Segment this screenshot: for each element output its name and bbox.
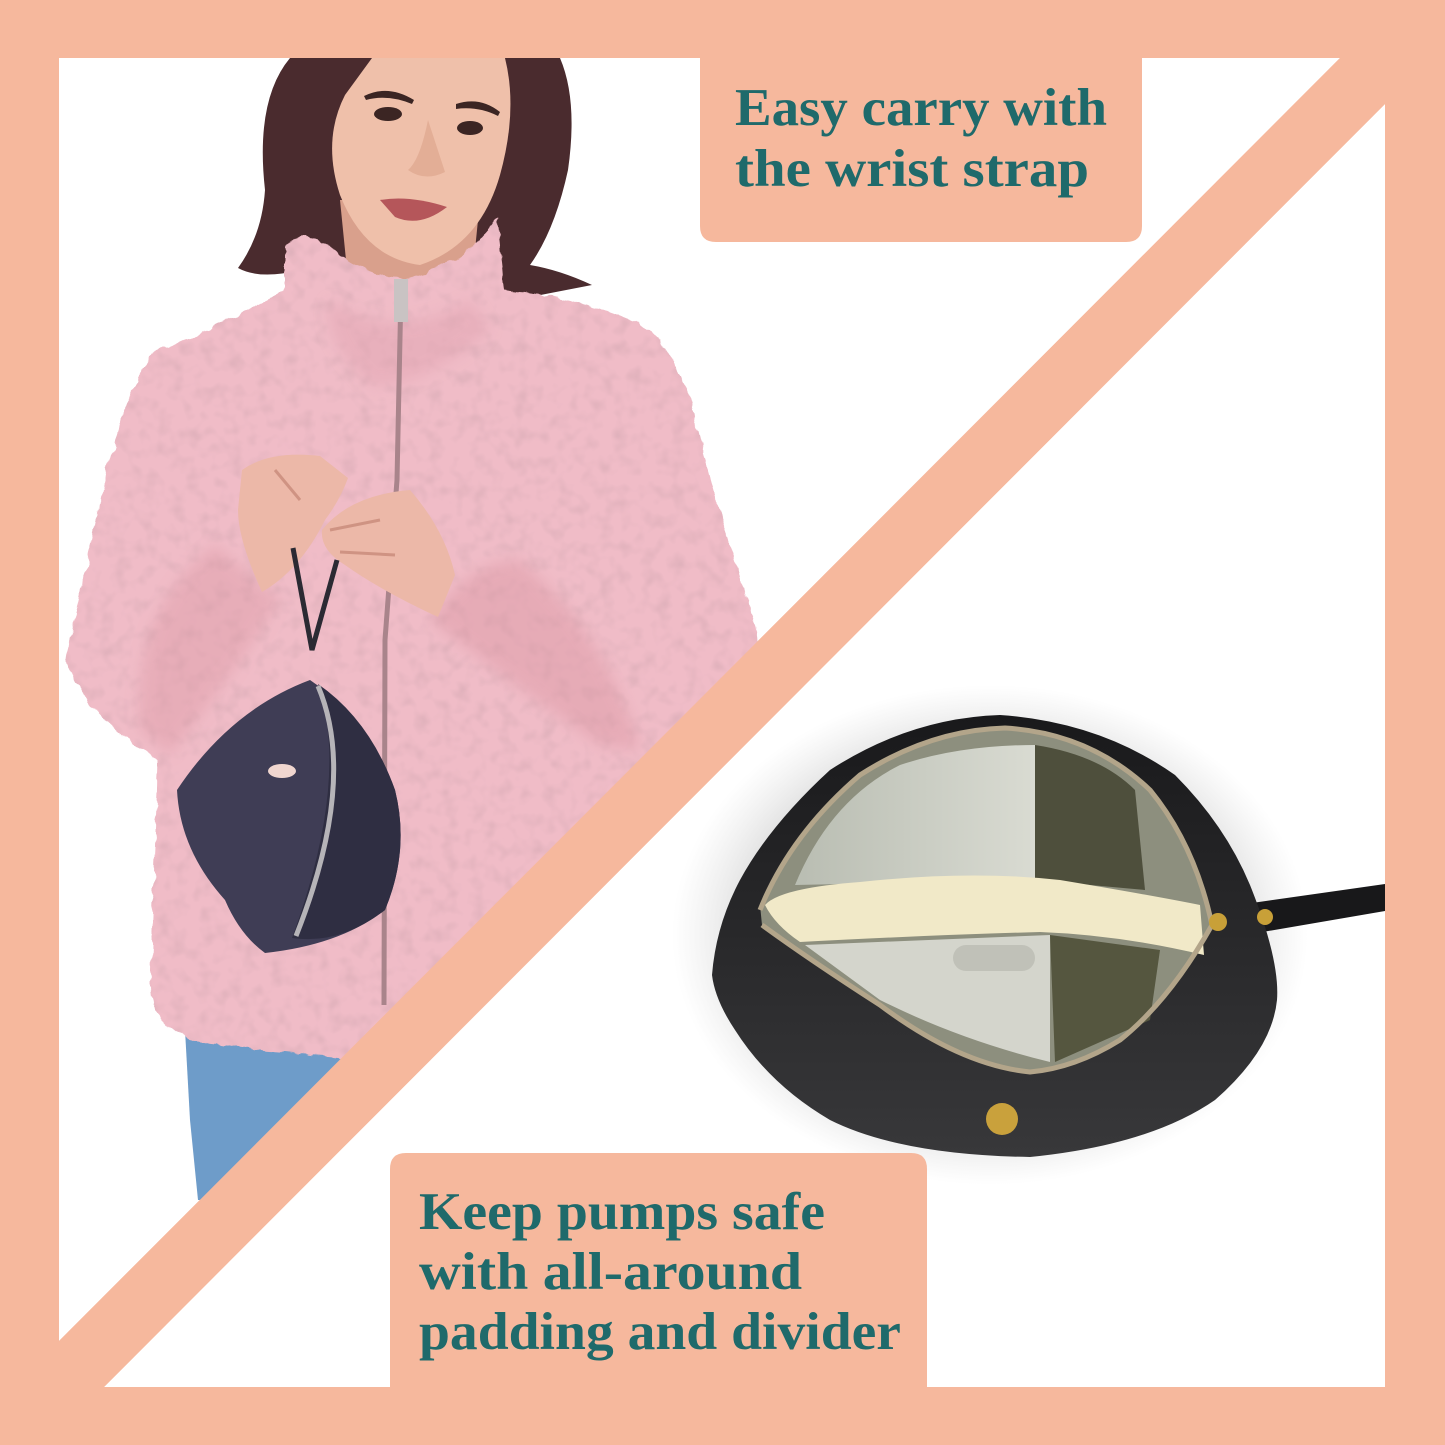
pump button — [953, 945, 1035, 971]
wrist strap — [1238, 884, 1385, 935]
panel: upper-left white triangle — [59, 58, 1340, 1341]
callout text: padding and divider — [419, 1303, 901, 1361]
eyes — [364, 91, 500, 135]
callout box — [390, 1153, 927, 1387]
callout text: Keep pumps safe — [419, 1183, 825, 1241]
bag side panel — [292, 684, 401, 939]
jeans — [185, 1030, 370, 1200]
strap rivet — [1257, 909, 1273, 925]
gold badge — [986, 1103, 1018, 1135]
callout: wrist strap — [700, 58, 1142, 242]
small navy bag — [177, 680, 401, 953]
jacket sleeve shading — [430, 560, 640, 750]
zipper pull — [394, 279, 408, 322]
finger lines — [275, 470, 395, 555]
cream divider — [765, 875, 1204, 955]
right hand — [322, 490, 455, 617]
lower pump — [805, 935, 1050, 1062]
bag zipper — [296, 686, 334, 936]
zipper pull — [1209, 913, 1227, 931]
wrist strap — [293, 548, 337, 650]
zipper — [384, 290, 401, 1005]
callout text: the wrist strap — [735, 140, 1089, 198]
neck — [340, 200, 480, 300]
callout: padding and divider — [390, 1153, 927, 1387]
hands — [238, 455, 348, 592]
bag badge — [268, 764, 296, 778]
photo: open black pump bag — [672, 685, 1385, 1185]
upper bottle — [1035, 745, 1145, 890]
face — [332, 58, 510, 265]
collar shading — [328, 300, 490, 385]
nose shading — [408, 120, 445, 177]
jacket left sleeve shading — [139, 545, 280, 755]
bag interior — [760, 730, 1212, 1072]
lower bottle — [1050, 935, 1160, 1062]
bag body — [712, 715, 1277, 1157]
fleece jacket — [65, 218, 760, 1075]
mouth — [380, 199, 447, 221]
soft shadow — [672, 685, 1308, 1185]
callout text: Easy carry with — [735, 79, 1107, 137]
gold zipper — [760, 728, 1212, 1072]
upper pump — [795, 745, 1035, 885]
panel: lower-right white triangle — [104, 104, 1385, 1387]
callout text: with all-around — [419, 1243, 802, 1301]
hair — [238, 58, 592, 332]
callout box — [700, 58, 1142, 242]
photo: woman holding bag by wrist strap — [65, 58, 760, 1200]
